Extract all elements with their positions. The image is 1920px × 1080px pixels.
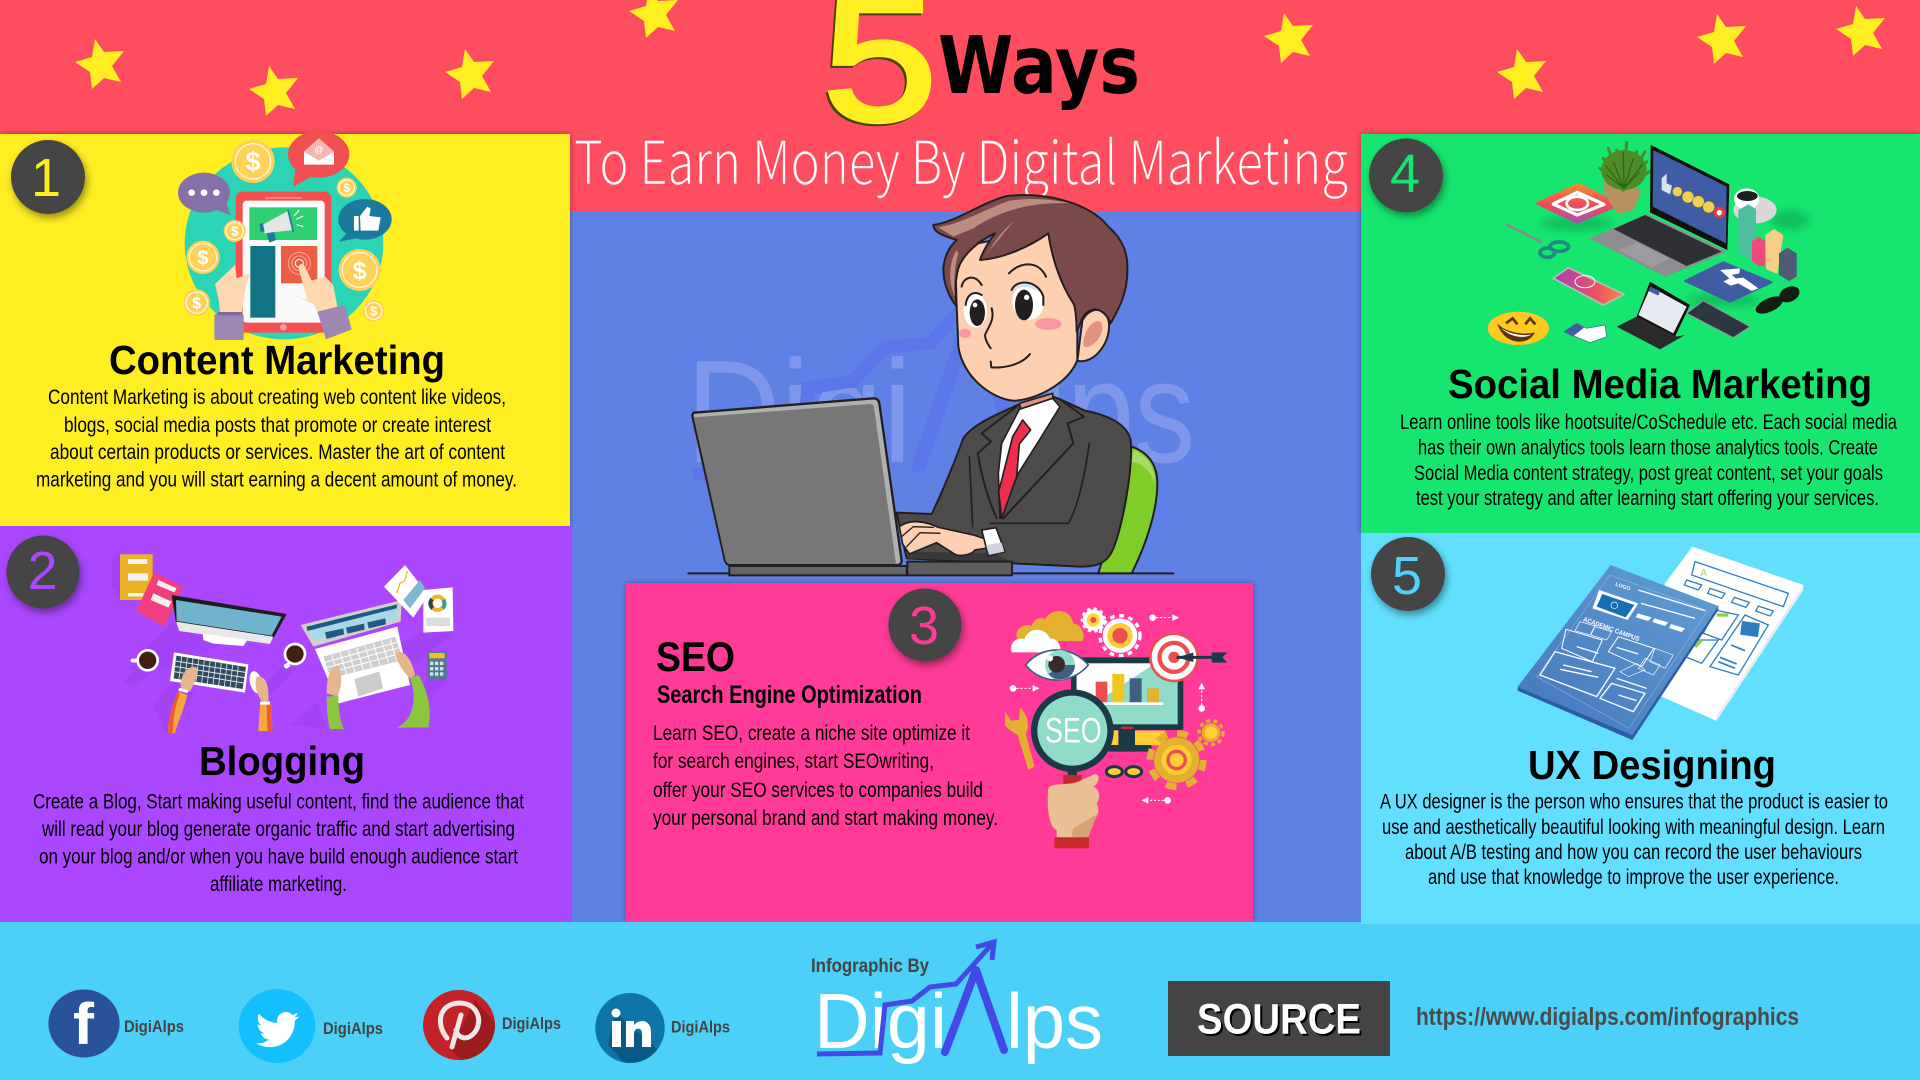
badge 1 (11, 140, 85, 214)
badge 5: 5 (1392, 546, 1422, 606)
panel: 3 seo (626, 583, 1253, 922)
eye tint (1013, 283, 1043, 295)
icon: phone with coins: $ (197, 248, 209, 270)
lapels (978, 399, 1084, 518)
icon: phone with coins: $ (231, 224, 239, 239)
body text: for search engines, start SEOwriting, (653, 749, 934, 773)
panel: 5 ux designing (1361, 533, 1920, 924)
heading: Content Marketing (109, 337, 445, 383)
panel background (626, 583, 1253, 922)
body text (36, 385, 517, 492)
logo wordmark: lps (1006, 977, 1103, 1065)
laptop screen (692, 398, 902, 565)
icon: phone with coins (178, 131, 392, 340)
icon: phone with coins: $ (246, 147, 261, 177)
body text: marketing and you will start earning a decent amount of money. (36, 468, 517, 492)
heading: Social Media Marketing (1448, 361, 1872, 407)
stars (75, 0, 1885, 116)
source button: SOURCE (1197, 996, 1361, 1044)
social: pinterest (423, 990, 560, 1060)
icon: social desk objects (1488, 142, 1810, 349)
desk line (688, 570, 1173, 576)
social: facebook (48, 990, 184, 1058)
hair highlight (938, 199, 1070, 297)
ear inner (1083, 321, 1102, 347)
social: facebook: DigiAlps (124, 1017, 184, 1036)
badge 4: 4 (1390, 144, 1420, 204)
panel: 2 blogging (0, 526, 572, 923)
source button (1168, 981, 1390, 1056)
body text: on your blog and/or when you have build enough audience start (39, 844, 518, 868)
jacket (897, 397, 1131, 567)
icon: desk with computers (112, 554, 453, 733)
character at laptop (688, 195, 1173, 575)
cuff (982, 528, 1005, 556)
badge 3: 3 (909, 596, 939, 656)
lower dark (907, 552, 1013, 563)
social: linkedin (595, 993, 730, 1063)
watermark logo: lps (1040, 330, 1195, 493)
panel background (1361, 533, 1920, 924)
social: twitter (239, 989, 383, 1063)
body text: blogs, social media posts that promote or create interest (64, 413, 491, 437)
right eye (1012, 283, 1044, 320)
social: pinterest: DigiAlps (502, 1014, 561, 1033)
fingers (902, 527, 940, 547)
subtitle: To Earn Money By Digital Marketing (574, 115, 1348, 202)
watermark logo (686, 272, 1195, 493)
shirt (998, 398, 1060, 518)
credit label: Infographic By (811, 956, 929, 977)
icon: phone with coins: @ (314, 145, 324, 155)
chair (1098, 447, 1157, 573)
face (956, 230, 1077, 401)
title (821, 0, 1140, 160)
subheading: Search Engine Optimization (657, 681, 922, 709)
footer logo (811, 942, 1103, 1065)
eyes (964, 294, 987, 327)
social: twitter: DigiAlps (323, 1019, 383, 1038)
brows, lids, nose, mouth (962, 264, 1046, 367)
logo arrow (817, 942, 1004, 1054)
keyboard base (907, 562, 1012, 575)
body text (33, 790, 524, 896)
panel background (0, 134, 570, 526)
badge 4 (1369, 138, 1443, 212)
footer band (0, 922, 1920, 1080)
icon: seo illustration: SEO (1045, 712, 1102, 751)
icon: wireframe sheets: A (1700, 568, 1707, 579)
badge 3 (888, 588, 962, 662)
heading: Blogging (199, 738, 365, 784)
header band (0, 0, 1920, 214)
panel background (1361, 134, 1920, 533)
source url: https://www.digialps.com/infographics (1416, 1003, 1799, 1031)
title: Ways (938, 20, 1140, 112)
laptop lid face (694, 404, 896, 564)
social: linkedin: DigiAlps (671, 1018, 730, 1036)
panel background (0, 526, 572, 923)
right glint (1024, 295, 1029, 300)
icon: phone with coins: $ (343, 181, 350, 195)
body text (1380, 790, 1888, 889)
right pupil (1015, 290, 1033, 320)
body text: Learn SEO, create a niche site optimize it (653, 721, 970, 745)
watermark logo: Digi (686, 330, 912, 493)
icon: phone with coins: $ (192, 295, 201, 312)
icon: seo illustration (1005, 609, 1227, 848)
icon: wireframe sheets (1518, 547, 1803, 740)
icon: wireframe sheets: LOGO (1614, 582, 1631, 592)
heading: SEO (656, 633, 735, 680)
logo wordmark (814, 977, 1103, 1065)
icon: wireframe sheets: ACADEMIC CAMPUS (1582, 616, 1641, 643)
chair highlight (1132, 450, 1155, 483)
badge 5 (1371, 537, 1445, 611)
badge 2: 2 (27, 541, 58, 601)
hand (899, 522, 987, 555)
heading: UX Designing (1528, 742, 1776, 788)
left cheek (959, 329, 971, 338)
tie (999, 420, 1031, 518)
body text (1400, 410, 1897, 510)
body text: Content Marketing is about creating web content like videos, (48, 385, 506, 409)
body text: about certain products or services. Master the art of content (50, 440, 505, 464)
badge 1: 1 (31, 148, 61, 208)
body text: offer your SEO services to companies build (653, 778, 983, 802)
body text: Create a Blog, Start making useful content, find the audience that (33, 790, 524, 814)
cuff shade (986, 543, 1004, 555)
right cheek (1035, 318, 1062, 330)
ear (1077, 310, 1109, 361)
social: facebook: f (73, 992, 95, 1057)
badge 2 (6, 536, 80, 608)
icon: phone with coins: $ (353, 257, 367, 285)
laptop base (729, 566, 907, 575)
center panel background (570, 212, 1362, 924)
panel: 1 content marketing (0, 131, 570, 526)
jacket folds (969, 443, 1089, 527)
left glint (973, 303, 977, 307)
logo wordmark: Digi (814, 977, 947, 1065)
hair (933, 195, 1127, 332)
body text: will read your blog generate organic traffic and start advertising (41, 817, 515, 841)
neck (1019, 393, 1053, 417)
source button: SOURCE (1199, 998, 1363, 1046)
body text (653, 721, 998, 830)
panel: 4 social media marketing (1361, 134, 1920, 533)
icon: phone with coins: $ (370, 304, 377, 318)
left pupil (970, 299, 985, 326)
body text: your personal brand and start making money. (653, 806, 998, 830)
body text: affiliate marketing. (210, 872, 347, 896)
